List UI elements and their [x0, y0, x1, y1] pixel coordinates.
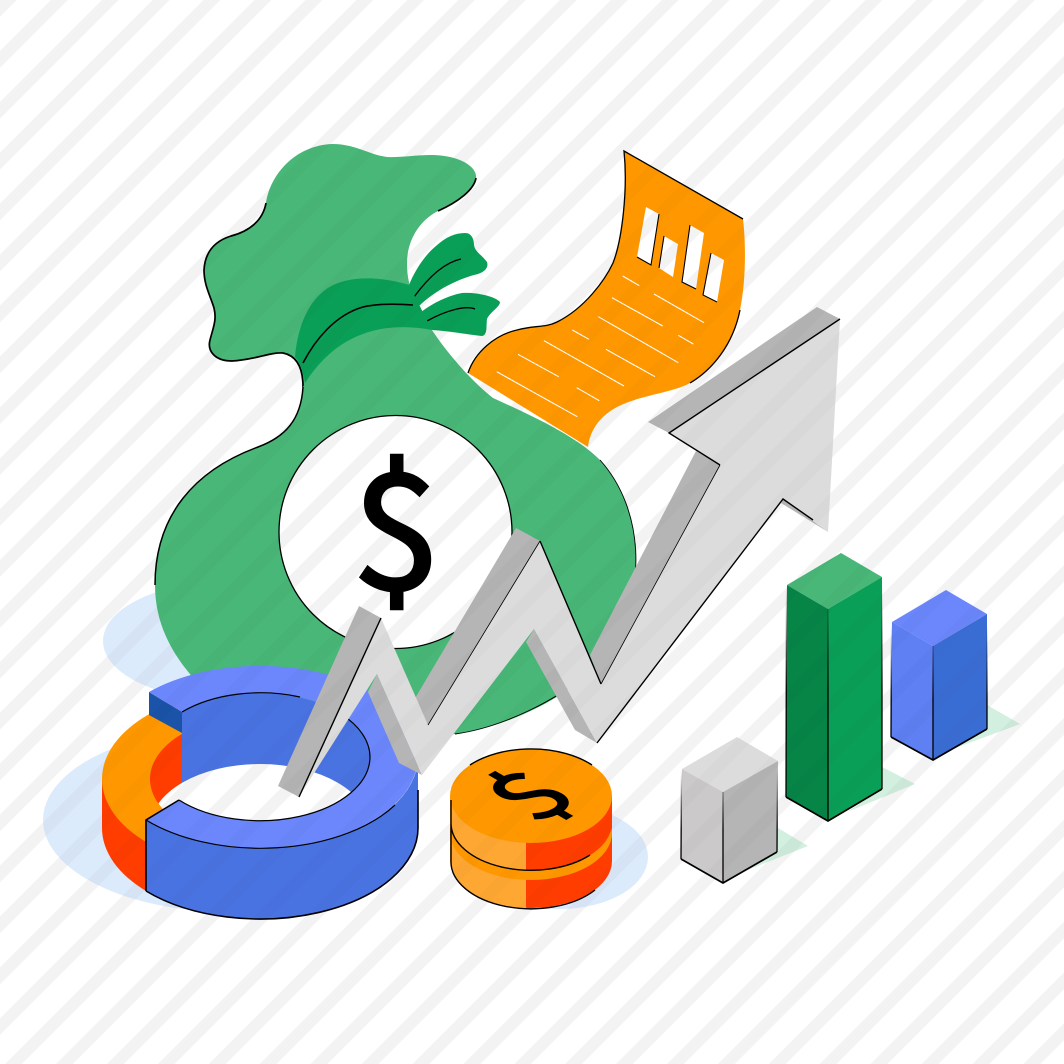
blue cut face	[149, 692, 182, 733]
upper coin top	[450, 749, 612, 843]
paper sheet	[468, 151, 745, 447]
shadow: money bag	[103, 581, 357, 701]
bar: gray	[681, 737, 778, 883]
bar: blue	[891, 590, 987, 760]
bag body	[155, 326, 636, 738]
ring hole	[158, 764, 351, 820]
neck band	[295, 278, 432, 383]
blue top face	[146, 666, 418, 848]
shadow: coins	[472, 805, 648, 909]
paper report	[468, 151, 745, 447]
paper outline	[468, 151, 743, 383]
ruffle outline	[204, 178, 476, 387]
lower coin top	[450, 786, 612, 880]
paper text lines	[497, 276, 704, 417]
coin dollar sign: $	[445, 746, 604, 838]
blue side	[146, 757, 418, 919]
body outline right	[455, 460, 636, 734]
upper coin side	[452, 814, 612, 870]
orange inner wall	[150, 734, 182, 809]
circle stripes	[280, 416, 512, 648]
arrow thin outlines	[428, 465, 720, 725]
neck crease	[303, 304, 413, 363]
arrow side faces	[278, 307, 840, 797]
body outline	[155, 387, 303, 585]
ring inner outlines	[146, 693, 395, 848]
bow creases	[414, 259, 475, 321]
dollar circle	[279, 416, 512, 648]
dollar sign: $	[352, 404, 440, 636]
orange segment side	[102, 780, 146, 891]
bar chart	[681, 553, 1020, 883]
money bag	[155, 144, 636, 738]
arrow outlines	[299, 319, 840, 797]
ring outlines	[146, 790, 418, 919]
bar shadows	[740, 705, 1020, 873]
bar: green	[786, 553, 882, 821]
ring chart	[102, 666, 418, 919]
lower coin side	[450, 824, 612, 908]
blue inner wall	[182, 693, 370, 792]
arrow front face	[299, 319, 840, 797]
bow upper	[409, 233, 487, 307]
orange segment top	[102, 704, 182, 842]
growth arrow	[278, 307, 840, 797]
shadow: ring chart	[43, 728, 417, 912]
bow lower	[420, 293, 500, 336]
coin stack	[445, 746, 612, 909]
coin outlines	[451, 749, 595, 909]
bag ruffle	[204, 144, 476, 387]
paper mini bar chart	[637, 207, 724, 302]
